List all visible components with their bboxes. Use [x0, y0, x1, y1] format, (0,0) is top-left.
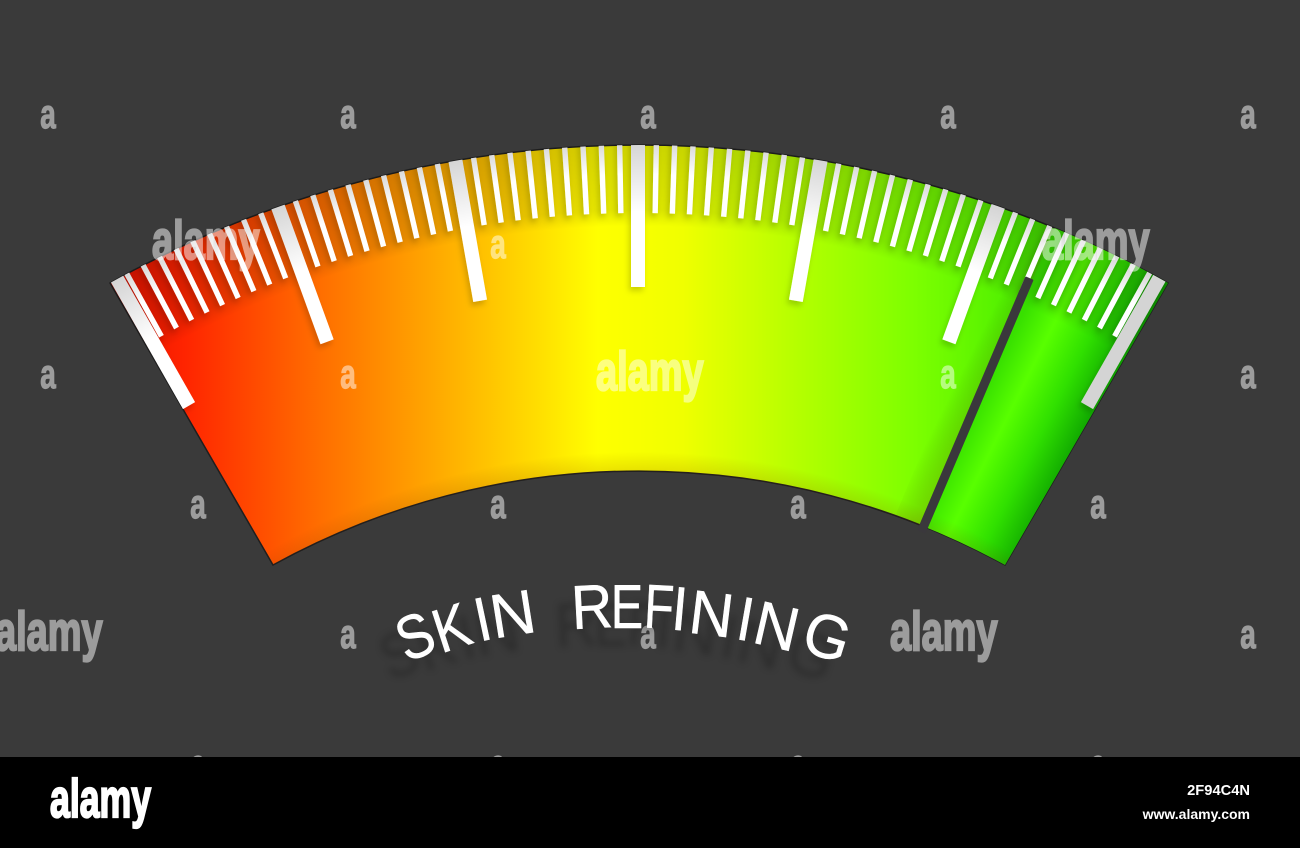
- scale ticks: [108, 136, 1168, 409]
- small watermark letters on background: a: [1240, 92, 1256, 137]
- small watermark letters on background: a: [490, 742, 506, 787]
- label: SKIN REFINING: I: [669, 575, 690, 644]
- label: SKIN REFINING: I: [468, 585, 497, 655]
- small watermark letters on gauge: a: [490, 222, 506, 267]
- small watermark letters on background: a: [1090, 482, 1106, 527]
- large watermarks: [0, 210, 1150, 663]
- small watermark letters on background: a: [1090, 742, 1106, 787]
- gauge colour band: [110, 145, 1168, 565]
- small watermark letters on gauge: [340, 222, 956, 397]
- label: SKIN REFINING: I: [732, 585, 759, 655]
- small watermark letters on background: a: [640, 92, 656, 137]
- label: SKIN REFINING: N: [747, 588, 806, 666]
- large watermarks: alamy: [1042, 210, 1150, 272]
- small watermark letters on background: a: [940, 92, 956, 137]
- small watermark letters on background: a: [340, 92, 356, 137]
- needle: [917, 276, 1034, 534]
- label: SKIN REFINING: [386, 571, 859, 676]
- small watermark letters on background: a: [640, 612, 656, 657]
- tick band shading: [100, 130, 1180, 580]
- label: SKIN REFINING: N: [686, 577, 738, 652]
- small watermark letters on background: a: [790, 742, 806, 787]
- small watermark letters on background: a: [340, 612, 356, 657]
- label: SKIN REFINING: K: [424, 590, 479, 667]
- small watermark letters on background: a: [40, 352, 56, 397]
- small watermark letters on background: a: [1240, 352, 1256, 397]
- section right of needle: [928, 228, 1168, 565]
- label: SKIN REFINING: R: [569, 571, 614, 643]
- label: SKIN REFINING: F: [643, 572, 676, 642]
- small watermark letters on gauge: a: [340, 352, 356, 397]
- large watermarks: alamy: [596, 341, 704, 403]
- small watermark letters on background: a: [490, 482, 506, 527]
- small watermark letters on background: a: [1240, 612, 1256, 657]
- label: SKIN REFINING: N: [485, 577, 540, 652]
- small watermark letters on background: a: [190, 482, 206, 527]
- footer bar: [0, 757, 1300, 848]
- small watermark letters on background: [40, 92, 1256, 787]
- small watermark letters on background: a: [40, 92, 56, 137]
- website: www.alamy.com: [1142, 806, 1250, 822]
- small watermark letters on gauge: a: [940, 352, 956, 397]
- footer logo: alamy: [50, 769, 151, 829]
- small watermark letters on background: a: [190, 742, 206, 787]
- shadow left of needle: [897, 224, 1054, 524]
- label: SKIN REFINING: G: [795, 596, 859, 676]
- small watermark letters on background: a: [790, 482, 806, 527]
- large watermarks: alamy: [152, 210, 260, 272]
- gauge: [109, 144, 1169, 566]
- label: SKIN REFINING: S: [386, 599, 445, 676]
- large watermarks: alamy: [890, 601, 998, 663]
- label: SKIN REFINING: E: [611, 572, 643, 641]
- image id: 2F94C4N: [1187, 783, 1250, 799]
